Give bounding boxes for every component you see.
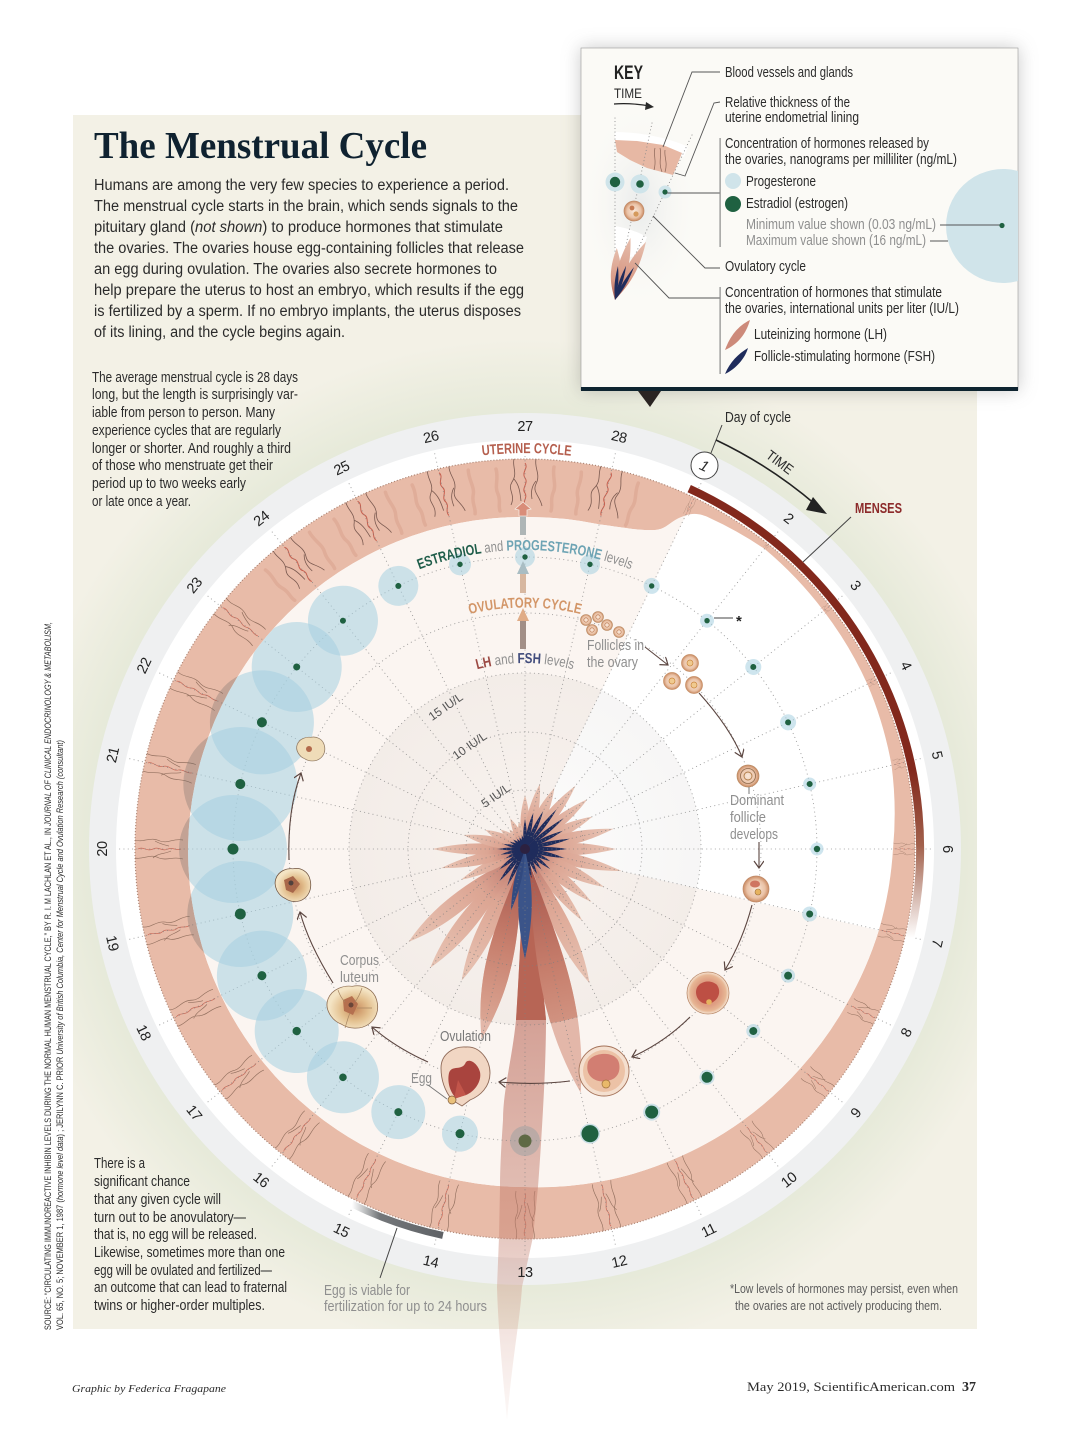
day-of-cycle numbers: 6 <box>939 845 955 853</box>
day-of-cycle numbers: 21 <box>104 746 123 764</box>
key time label with arrow <box>614 85 654 110</box>
side note: anovulatory cycles: Likewise, sometimes more than one <box>94 1245 285 1261</box>
key: ovarian hormones label: the ovaries, nanograms per milliliter (ng/mL) <box>725 152 957 168</box>
chart: estradiol dots <box>228 554 820 1148</box>
key mini diagram <box>580 100 700 310</box>
day-of-cycle numbers: 13 <box>517 1265 533 1281</box>
key: blood vessels label: Blood vessels and glands <box>725 65 853 81</box>
day-of-cycle numbers: 25 <box>332 458 353 479</box>
key time label with arrow: TIME <box>614 85 642 101</box>
day-of-cycle numbers: 8 <box>898 1026 916 1040</box>
intro paragraph: help prepare the uterus to host an embryo, which results if the egg <box>94 282 524 299</box>
LH peak on day 13 extending beyond the dial <box>497 849 546 1420</box>
key: pituitary hormones label: Concentration of hormones that stimulate <box>725 285 942 301</box>
label: dominant follicle develops: develops <box>730 827 778 843</box>
label: time along the arc: TIME <box>763 447 797 477</box>
label: egg with leader: Egg <box>411 1071 432 1087</box>
day-of-cycle numbers: 14 <box>421 1253 440 1272</box>
day 1 marker with leader <box>691 425 722 479</box>
LH: pale extension of the long petals <box>469 846 595 1096</box>
panel: key <box>580 48 1018 407</box>
day-of-cycle numbers: 27 <box>517 419 533 435</box>
footer: folio: May 2019, ScientificAmerican.com <box>747 1379 955 1394</box>
label: follicles in the ovary: Follicles in <box>587 638 644 654</box>
IU/L scale labels <box>426 690 513 811</box>
intro paragraph: of its lining, and the cycle begins again. <box>94 324 345 341</box>
footnote <box>730 1282 958 1313</box>
day-of-cycle numbers: 11 <box>699 1221 719 1241</box>
day-of-cycle numbers: 17 <box>182 1102 205 1125</box>
chart: LH peak petals inside the disc <box>480 864 578 1023</box>
key heading: KEY <box>614 63 643 84</box>
ovulatory cycle arrows <box>289 647 759 1083</box>
day-of-cycle numbers: 7 <box>928 937 945 949</box>
key: maximum value circle <box>946 169 1018 283</box>
side note: anovulatory cycles: There is a <box>94 1156 146 1172</box>
heading: LH and FSH levels: LH and FSH levels <box>475 652 574 670</box>
side note: anovulatory cycles: that any given cycle will <box>94 1192 221 1208</box>
key: minimum and maximum notes: Maximum value shown (16 ng/mL) <box>746 233 926 249</box>
day-of-cycle numbers: 10 <box>778 1169 801 1192</box>
day-of-cycle numbers: 23 <box>184 575 206 597</box>
side note: anovulatory cycles: that is, no egg will be released. <box>94 1227 257 1243</box>
day-of-cycle numbers: 28 <box>610 428 628 447</box>
source credit (vertical): VOL. 65, NO. 5; NOVEMBER 1, 1987 (hormone level data) ; JERILYNN C. PRIOR University of British Columbia, Center for Menstrual Cycle and Ovulation Research (consultant) <box>55 740 66 1330</box>
panel: beige background <box>73 115 977 1329</box>
footer: folio: 37 <box>962 1380 976 1395</box>
corpus luteum: medium <box>275 868 311 902</box>
key: FSH legend: Follicle-stimulating hormone (FSH) <box>754 349 935 365</box>
key: estradiol legend: Estradiol (estrogen) <box>746 196 848 212</box>
side note: anovulatory cycles: significant chance <box>94 1174 190 1190</box>
intro paragraph: the ovaries. The ovaries house egg-containing follicles that release <box>94 240 524 257</box>
side note: anovulatory cycles <box>94 1156 287 1314</box>
key: pituitary hormones label <box>725 285 959 317</box>
key base rule <box>581 387 1018 391</box>
day-of-cycle numbers: 18 <box>132 1023 154 1044</box>
day-of-cycle numbers: 24 <box>251 508 273 530</box>
side note: cycle length: The average menstrual cycle is 28 days <box>92 370 298 386</box>
key: progesterone legend <box>725 173 816 190</box>
footer: graphic credit: Graphic by Federica Fragapane <box>72 1383 226 1395</box>
intro paragraph: pituitary gland (not shown) to produce hormones that stimulate <box>94 219 503 236</box>
key: progesterone legend: Progesterone <box>746 174 816 190</box>
side note: cycle length: experience cycles that are regularly <box>92 423 282 439</box>
IU/L scale labels: 15 IU/L <box>426 690 466 724</box>
ovulation illustration <box>441 1047 490 1106</box>
key bracket rules <box>720 138 721 374</box>
chart: progesterone circles <box>172 547 824 1156</box>
intro paragraph: The menstrual cycle starts in the brain, which sends signals to the <box>94 198 518 215</box>
day 1 marker with leader: 1 <box>697 457 711 476</box>
day-of-cycle numbers: 19 <box>102 934 121 953</box>
side note: cycle length: iable from person to person. Many <box>92 405 276 421</box>
corpus luteum: large <box>327 986 378 1028</box>
side note: cycle length: of those who menstruate get their <box>92 458 273 474</box>
key leader lines <box>635 72 1002 298</box>
label: dominant follicle develops: Dominant <box>730 793 784 809</box>
footnote: the ovaries are not actively producing them. <box>735 1299 942 1313</box>
progesterone shadow where circles overlap the endometrium <box>179 676 238 952</box>
day-of-cycle numbers: 16 <box>250 1169 272 1192</box>
day-of-cycle numbers: 3 <box>846 578 864 594</box>
follicles growing <box>664 654 702 694</box>
egg viability arc with label <box>324 1204 487 1315</box>
footnote: *Low levels of hormones may persist, even when <box>730 1282 958 1296</box>
dominant follicle <box>737 765 759 794</box>
label: ovulation: Ovulation <box>440 1029 491 1045</box>
IU/L scale labels: 5 IU/L <box>479 781 513 811</box>
key: endometrial lining label: Relative thickness of the <box>725 95 850 111</box>
title: The Menstrual Cycle <box>94 125 427 167</box>
day-of-cycle numbers: 20 <box>95 841 111 857</box>
side note: cycle length: or late once a year. <box>92 494 191 510</box>
key: minimum and maximum notes <box>746 217 936 249</box>
chart: luteinizing hormone petals <box>403 782 623 987</box>
intro paragraph <box>94 177 524 341</box>
label: dominant follicle develops <box>730 793 784 843</box>
heading: uterine cycle: UTERINE CYCLE <box>482 443 572 456</box>
source credit (vertical): SOURCE: “CIRCULATING IMMUNOREACTIVE INHIBIN LEVELS DURING THE NORMAL HUMAN MENSTRUAL CYCLE,” BY R. I. M LACHLAN ET AL., IN JOURNAL OF CLINICAL ENDOCRINOLOGY & METABOLISM, <box>43 622 54 1330</box>
side note: anovulatory cycles: an outcome that can lead to fraternal <box>94 1280 287 1296</box>
key: pituitary hormones label: the ovaries, international units per liter (IU/L) <box>725 301 959 317</box>
day-of-cycle numbers: 26 <box>422 428 441 447</box>
source credit (vertical) <box>43 622 66 1330</box>
day-of-cycle numbers: 9 <box>848 1105 865 1121</box>
side note: cycle length: period up to two weeks early <box>92 476 247 492</box>
key: minimum and maximum notes: Minimum value shown (0.03 ng/mL) <box>746 217 936 233</box>
intro paragraph: is fertilized by a sperm. If no embryo implants, the uterus disposes <box>94 303 521 320</box>
egg viability arc with label: fertilization for up to 24 hours <box>324 1299 487 1315</box>
label: menses with leader <box>803 500 902 562</box>
label: follicles in the ovary <box>587 638 644 671</box>
side note: cycle length: longer or shorter. And roughly a third <box>92 441 291 457</box>
side note: anovulatory cycles: twins or higher-order multiples. <box>94 1298 265 1314</box>
inner field of the dial <box>188 514 895 1188</box>
side note: anovulatory cycles: egg will be ovulated and fertilized— <box>94 1263 272 1279</box>
day-of-cycle numbers: 5 <box>928 750 945 761</box>
IU/L scale labels: 10 IU/L <box>450 729 490 763</box>
label: egg with leader <box>411 1071 447 1099</box>
key: ovarian hormones label <box>725 136 957 168</box>
key pointer <box>638 391 661 407</box>
key: endometrial lining label: uterine endometrial lining <box>725 110 859 126</box>
chart: follicle-stimulating hormone petals <box>498 808 570 959</box>
label: dominant follicle develops: follicle <box>730 810 766 826</box>
day-of-cycle numbers <box>95 419 955 1281</box>
asterisk callout <box>714 613 742 630</box>
day-of-cycle numbers: 2 <box>780 510 796 528</box>
key: FSH legend <box>725 348 935 374</box>
key: ovarian hormones label: Concentration of hormones released by <box>725 136 930 152</box>
key: estradiol legend <box>725 196 848 212</box>
day-of-cycle numbers: 15 <box>331 1220 352 1242</box>
label: menses with leader: MENSES <box>855 500 902 517</box>
label: follicles in the ovary: the ovary <box>587 655 639 671</box>
day-of-cycle numbers: 22 <box>134 655 155 676</box>
chart grid: spokes and rings <box>119 443 931 1255</box>
key: LH legend: Luteinizing hormone (LH) <box>754 327 887 343</box>
follicle: day 9 <box>687 972 729 1014</box>
label: corpus luteum: Corpus <box>340 953 379 969</box>
uterine cycle: endometrium band <box>135 459 915 1239</box>
key: endometrial lining label <box>725 95 859 126</box>
side note: cycle length: long, but the length is surprisingly var- <box>92 387 298 403</box>
side note: cycle length <box>92 370 298 510</box>
label: corpus luteum: luteum <box>340 970 379 986</box>
follicle: day 7 <box>743 876 769 902</box>
label: day of cycle: Day of cycle <box>725 410 791 426</box>
panel glow around the dial <box>73 386 977 1312</box>
label: corpus luteum <box>340 953 379 986</box>
day-of-cycle numbers: 4 <box>896 659 914 673</box>
egg viability arc with label: Egg is viable for <box>324 1283 410 1299</box>
key background <box>581 48 1018 390</box>
asterisk callout: * <box>736 613 742 630</box>
heading: estradiol and progesterone levels: ESTRADIOL and PROGESTERONE levels <box>416 540 632 570</box>
vertical arrows linking the cycles <box>515 502 531 649</box>
arrow: time <box>716 440 827 514</box>
key: LH legend <box>725 320 887 350</box>
dial rings <box>89 413 961 1285</box>
intro paragraph: Humans are among the very few species to experience a period. <box>94 177 509 194</box>
corpus luteum: small <box>297 737 325 761</box>
blood vessels and glands <box>135 459 915 1239</box>
menses arc <box>689 489 920 945</box>
side note: anovulatory cycles: turn out to be anovulatory— <box>94 1210 246 1226</box>
key: ovulatory cycle label: Ovulatory cycle <box>725 259 806 275</box>
follicles in the ovary <box>580 612 624 638</box>
heading: ovulatory cycle: OVULATORY CYCLE <box>468 598 582 614</box>
key dot: minimum value <box>999 223 1005 228</box>
day-of-cycle numbers: 12 <box>610 1253 629 1272</box>
intro paragraph: an egg during ovulation. The ovaries also secrete hormones to <box>94 261 497 278</box>
follicle: pre-ovulatory <box>579 1046 629 1096</box>
